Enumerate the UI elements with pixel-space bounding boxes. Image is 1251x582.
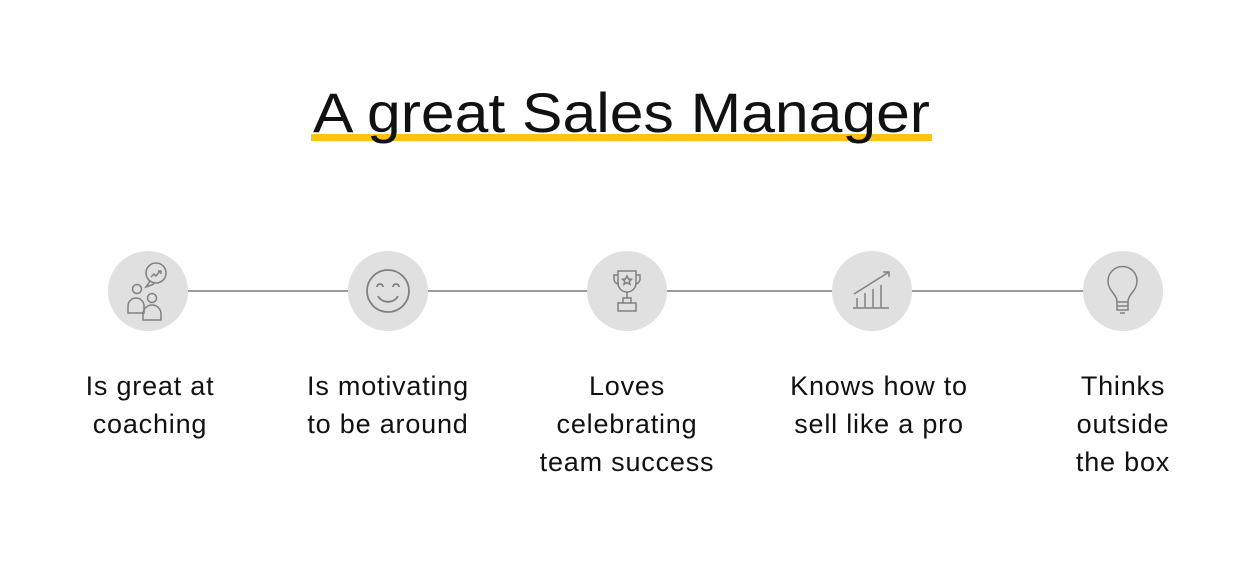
label: motivating: Is motivating xyxy=(307,371,469,401)
label: celebrating: celebrating xyxy=(557,409,697,439)
icon: smile xyxy=(348,251,428,331)
label: thinks: outside xyxy=(1077,409,1169,439)
label: celebrating: team success xyxy=(540,447,714,477)
label: coaching: Is great at xyxy=(86,371,214,401)
icon: growth chart xyxy=(832,251,912,331)
label: coaching xyxy=(86,371,214,439)
label: motivating: to be around xyxy=(307,409,469,439)
icon: trophy xyxy=(587,251,667,331)
title text: A great Sales Manager xyxy=(313,81,930,144)
label: sell xyxy=(790,371,968,439)
title xyxy=(311,81,932,144)
label: thinks: Thinks xyxy=(1081,371,1165,401)
label: celebrating xyxy=(540,371,714,477)
label: sell: Knows how to xyxy=(790,371,968,401)
icon: coaching xyxy=(108,251,188,331)
label: coaching: coaching xyxy=(93,409,207,439)
label: motivating xyxy=(307,371,469,439)
label: thinks: the box xyxy=(1076,447,1170,477)
label: thinks xyxy=(1076,371,1170,477)
title underline xyxy=(311,134,932,141)
label: sell: sell like a pro xyxy=(794,409,964,439)
label: celebrating: Loves xyxy=(589,371,665,401)
icon: lightbulb xyxy=(1083,251,1163,331)
